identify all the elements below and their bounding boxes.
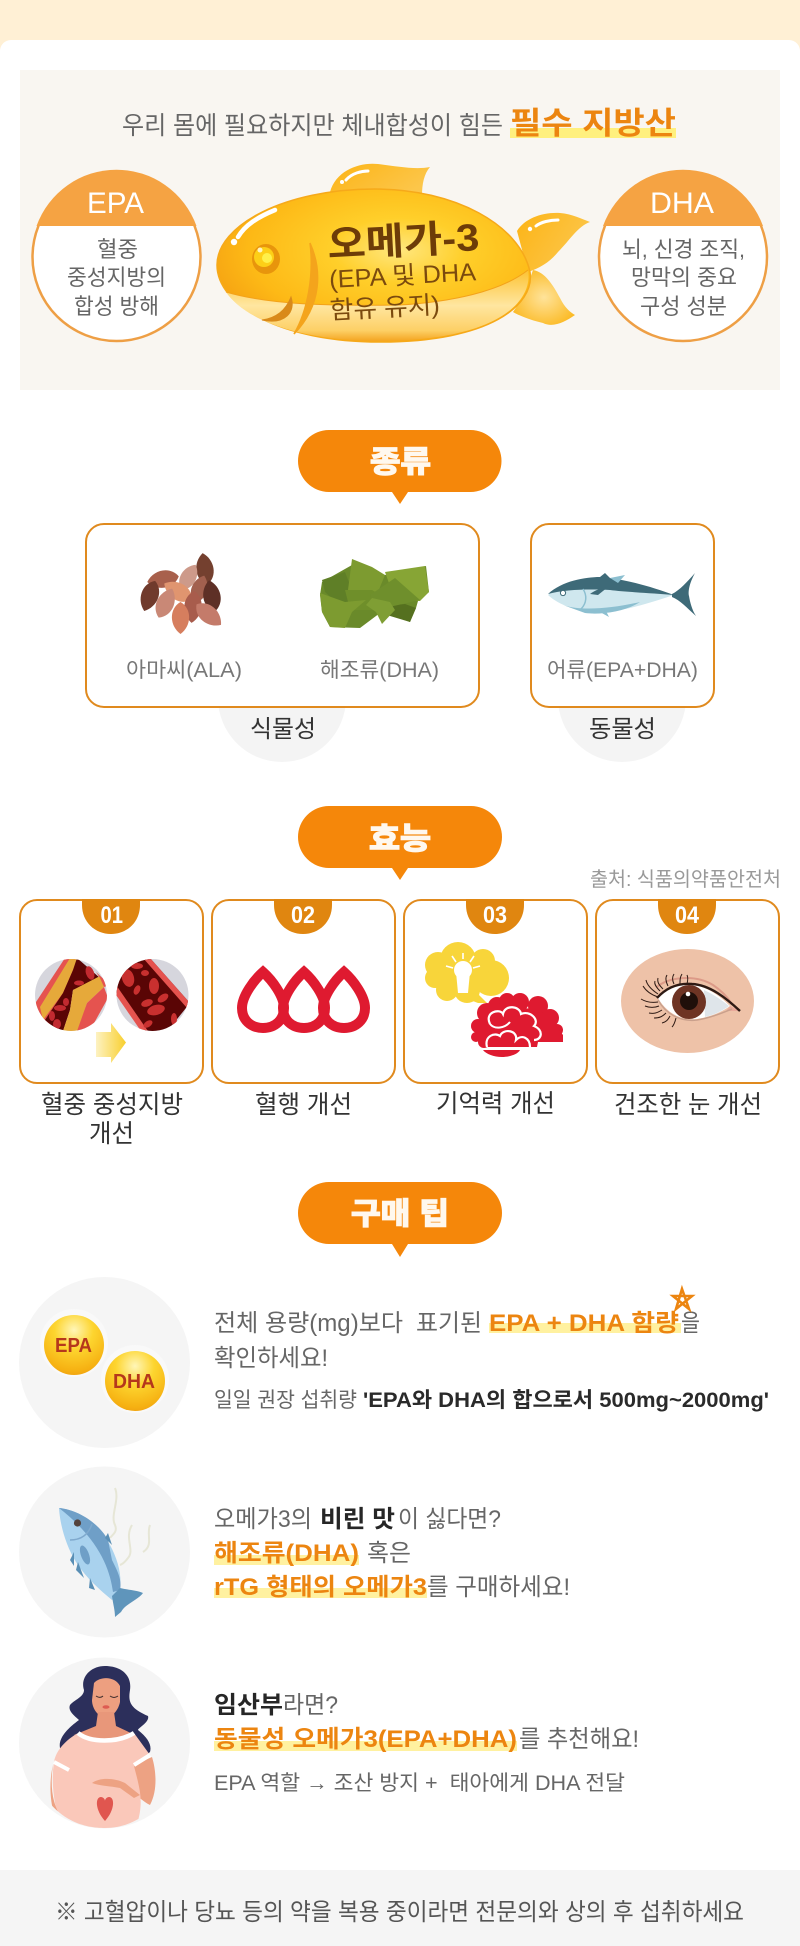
icon: clogged and clear arteries	[35, 959, 188, 1031]
tip 2 text: 이 싫다면?	[398, 1506, 501, 1533]
card 04: 04	[675, 902, 700, 929]
tip 1 text: 표기된	[416, 1310, 482, 1337]
circle: DHA: 구성 성분	[640, 294, 727, 319]
section badge: buying tips: 구매 팁	[351, 1198, 449, 1231]
circle: DHA: DHA	[650, 187, 714, 220]
capsule label text	[325, 217, 483, 325]
source note: 출처: 식품의약품안전처	[590, 868, 781, 891]
icon: tuna	[548, 573, 696, 617]
tip 2 text: 혹은	[367, 1540, 411, 1567]
heading: essential fatty acid: 우리 몸에 필요하지만 체내합성이 힘든	[122, 112, 503, 140]
tip 2 text: 를 구매하세요!	[427, 1574, 570, 1601]
panel: animal-based label circle: 동물성	[589, 716, 656, 743]
circle: DHA: 뇌, 신경 조직,	[622, 237, 745, 262]
card 01	[20, 899, 203, 1148]
tip 2 text: rTG 형태의 오메가3	[214, 1574, 427, 1601]
tip 3 text: 라면?	[283, 1692, 338, 1719]
icon: blood drops	[242, 972, 365, 1028]
footer note	[0, 1870, 800, 1946]
tip 1 text	[214, 1310, 769, 1412]
tip 3 text: 임산부	[214, 1692, 283, 1719]
icon: seaweed	[320, 559, 429, 628]
card 04	[596, 899, 779, 1119]
tip 3	[19, 1658, 639, 1830]
icon: EPA capsule: EPA	[55, 1335, 92, 1357]
icon: flax seeds	[136, 552, 227, 634]
capsule label text: 함유 유지)	[329, 291, 440, 325]
footer note: ※ 고혈압이나 당뇨 등의 약을 복용 중이라면 전문의와 상의 후 섭취하세요	[55, 1899, 744, 1926]
tip 2	[19, 1466, 570, 1638]
heading: essential fatty acid	[122, 106, 676, 141]
card 03: 기억력 개선	[436, 1090, 555, 1118]
card 03	[404, 899, 587, 1118]
tip 1 text: 확인하세요!	[214, 1345, 328, 1372]
circle: DHA	[599, 170, 767, 341]
tip 1 text: 일일 권장 섭취량	[214, 1389, 357, 1412]
tip 3 text: EPA 역할 → 조산 방지 + 태아에게 DHA 전달	[214, 1772, 625, 1795]
panel: plant sources	[86, 524, 479, 707]
card 01: 개선	[89, 1120, 134, 1148]
card 02	[212, 899, 395, 1119]
card 01: 혈중 중성지방	[41, 1091, 183, 1119]
icon: star accent	[673, 1289, 692, 1309]
section badge: types: 종류	[370, 446, 431, 479]
section badge: buying tips	[298, 1182, 502, 1257]
panel: animal source: 어류(EPA+DHA)	[547, 659, 698, 682]
tip 1	[19, 1277, 769, 1448]
top band	[0, 0, 800, 52]
panel: plant-based label circle: 식물성	[250, 716, 316, 743]
panel: animal-based label circle	[558, 634, 686, 762]
tip 3 text: 동물성 오메가3(EPA+DHA)	[214, 1726, 517, 1753]
tip 1 text: 전체 용량(mg)보다	[214, 1310, 403, 1337]
tip 1 text: 'EPA와 DHA의 합으로서 500mg~2000mg'	[363, 1389, 769, 1412]
card 02: 혈행 개선	[255, 1091, 352, 1119]
icon: omega-3 capsule fish	[217, 164, 590, 342]
card 02: 02	[291, 902, 315, 929]
tip 3 text: 를 추천해요!	[519, 1726, 639, 1753]
panel: plant sources: 아마씨(ALA)	[126, 659, 242, 682]
section badge: efficacy	[298, 806, 502, 880]
tip 2 text: 오메가3의	[214, 1506, 312, 1533]
icon: arrow	[96, 1023, 126, 1063]
tip 3 text	[214, 1692, 639, 1795]
tip 2 text	[214, 1506, 570, 1601]
circle: EPA: 중성지방의	[67, 265, 166, 290]
circle: EPA: 합성 방해	[74, 294, 159, 319]
icon: idea cloud	[425, 942, 509, 1003]
panel: plant-based label circle	[218, 634, 346, 762]
card 03: 03	[483, 902, 507, 929]
card 04: 건조한 눈 개선	[614, 1091, 762, 1119]
tip 2 text: 해조류(DHA)	[214, 1540, 359, 1567]
tip 1 text: EPA + DHA 함량	[489, 1310, 679, 1337]
circle: EPA: EPA	[87, 187, 144, 220]
icon: fishy smell fish	[59, 1488, 150, 1617]
icon: DHA capsule	[101, 1345, 169, 1413]
section badge: efficacy: 효능	[369, 823, 431, 856]
capsule label text: 오메가-3	[326, 217, 480, 267]
tip 1 text: 을	[681, 1310, 700, 1337]
panel: animal source	[531, 524, 714, 707]
section badge: types	[298, 430, 501, 504]
capsule label text: (EPA 및 DHA	[329, 258, 477, 294]
card 01: 01	[100, 902, 123, 929]
icon: EPA capsule	[40, 1309, 108, 1377]
panel: essential fatty acids	[20, 70, 780, 390]
tip 2 text: 비린 맛	[320, 1506, 395, 1533]
icon: DHA capsule: DHA	[113, 1371, 155, 1393]
heading: essential fatty acid: 필수 지방산	[510, 106, 676, 141]
circle: DHA: 망막의 중요	[631, 265, 737, 290]
circle: EPA	[32, 170, 200, 341]
icon: brain	[471, 993, 563, 1057]
bulb	[446, 953, 480, 993]
circle: EPA: 혈중	[97, 237, 138, 262]
icon: eye	[621, 949, 754, 1053]
icon: pregnant woman	[50, 1666, 156, 1830]
panel: plant sources: 해조류(DHA)	[320, 659, 439, 682]
